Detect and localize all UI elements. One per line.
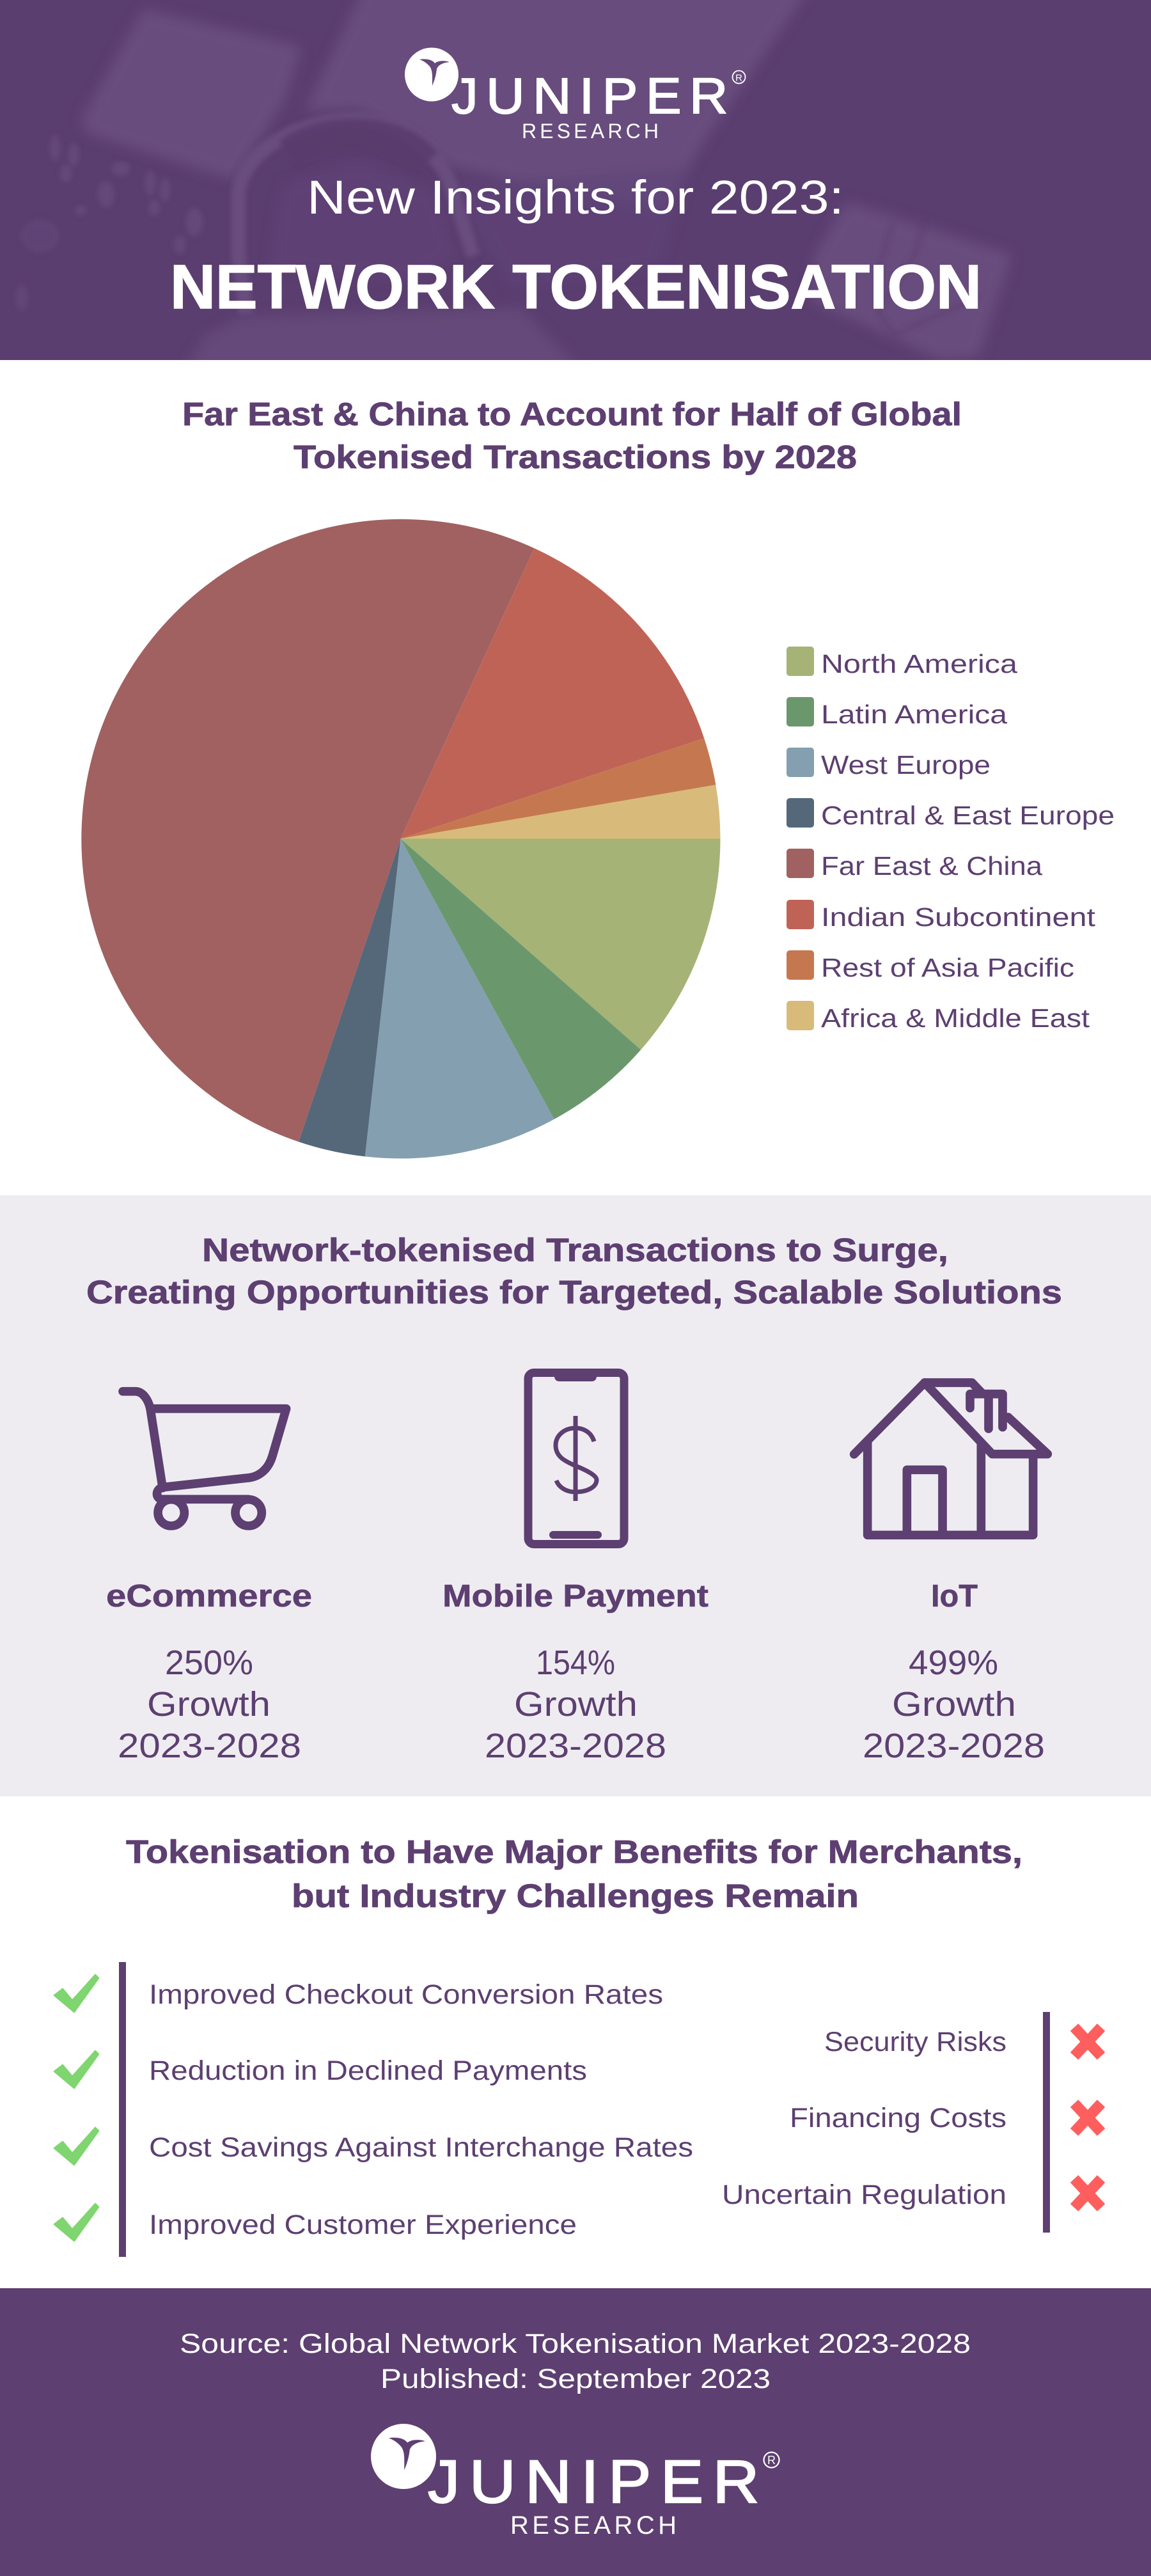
- icon: cross marks: [1074, 2027, 1101, 2208]
- panel: transaction growth: [0, 1195, 1151, 1796]
- source note: Published: September 2023: [380, 2364, 771, 2394]
- legend: Africa & Middle East: [821, 1003, 1090, 1033]
- list: benefits: Improved Checkout Conversion Rates: [149, 1979, 663, 2010]
- legend: North America: [821, 649, 1017, 679]
- logo: Juniper Research (footer): JUNIPER: [428, 2448, 769, 2516]
- panel: regional pie chart: [0, 360, 1151, 1195]
- stat: IoT: 2023-2028: [863, 1727, 1045, 1765]
- icon: mobile phone with dollar: [528, 1372, 624, 1544]
- list: challenges: Security Risks: [824, 2027, 1006, 2057]
- stat: eCommerce: 250%: [165, 1644, 253, 1682]
- legend: Rest of Asia Pacific: [821, 953, 1074, 982]
- divider: benefits bar: [119, 1962, 126, 2257]
- stat: IoT: 499%: [909, 1644, 998, 1682]
- logo: Juniper Research (footer): [371, 2424, 779, 2540]
- logo: Juniper Research (header): RESEARCH: [522, 120, 659, 143]
- list: challenges: Financing Costs: [790, 2103, 1006, 2133]
- stat: eCommerce: [106, 1579, 312, 1765]
- stat: Mobile Payment: Growth: [514, 1685, 638, 1724]
- stat: IoT: IoT: [931, 1579, 978, 1614]
- list: benefits: Improved Customer Experience: [149, 2210, 577, 2240]
- stat: eCommerce: Growth: [147, 1685, 270, 1724]
- pie chart: [81, 519, 721, 1159]
- legend: Latin America: [821, 700, 1007, 729]
- icon: shopping cart: [123, 1392, 286, 1526]
- panel: footer: [0, 2288, 1151, 2576]
- legend: Far East & China: [821, 851, 1042, 881]
- logo: Juniper Research (header): JUNIPER: [451, 67, 736, 124]
- legend: [787, 647, 1115, 1033]
- stat: Mobile Payment: 154%: [536, 1644, 615, 1682]
- list: benefits: [149, 1979, 693, 2240]
- heading: pie chart: Far East & China to Account for Half of Global: [182, 396, 962, 432]
- heading: benefits: but Industry Challenges Remain: [292, 1878, 859, 1914]
- heading: growth: Creating Opportunities for Targeted, Scalable Solutions: [86, 1274, 1062, 1310]
- icon: house: [854, 1383, 1047, 1535]
- title: NETWORK TOKENISATION: [170, 252, 982, 322]
- list: benefits: Reduction in Declined Payments: [149, 2055, 587, 2086]
- heading: growth: [86, 1232, 1062, 1310]
- list: benefits: Cost Savings Against Interchange Rates: [149, 2132, 693, 2163]
- stat: IoT: [863, 1579, 1045, 1765]
- logo: Juniper Research (footer): R: [767, 2454, 776, 2467]
- stat: IoT: Growth: [892, 1685, 1016, 1724]
- heading: benefits: [126, 1834, 1022, 1914]
- panel: benefits and challenges: [0, 1796, 1151, 2288]
- divider: challenges bar: [1043, 2012, 1050, 2233]
- source note: Source: Global Network Tokenisation Market 2023-2028: [180, 2329, 971, 2359]
- icon: check marks: [54, 1975, 98, 2241]
- stat: eCommerce: eCommerce: [106, 1579, 312, 1614]
- stat: Mobile Payment: 2023-2028: [485, 1727, 666, 1765]
- logo: Juniper Research (header): [405, 47, 746, 143]
- list: challenges: Uncertain Regulation: [722, 2179, 1006, 2210]
- stat: eCommerce: 2023-2028: [118, 1727, 301, 1765]
- heading: pie chart: Tokenised Transactions by 2028: [294, 439, 857, 475]
- stat: Mobile Payment: [442, 1579, 709, 1765]
- subtitle: New Insights for 2023:: [307, 171, 844, 224]
- heading: growth: Network-tokenised Transactions to Surge,: [202, 1232, 948, 1268]
- header banner: [0, 0, 1151, 384]
- source note: [180, 2329, 971, 2394]
- stat: Mobile Payment: Mobile Payment: [442, 1579, 709, 1614]
- logo: Juniper Research (header): R: [735, 73, 742, 83]
- list: challenges: [722, 2027, 1006, 2210]
- logo: Juniper Research (footer): RESEARCH: [510, 2511, 677, 2540]
- heading: benefits: Tokenisation to Have Major Benefits for Merchants,: [126, 1834, 1022, 1870]
- legend: Central & East Europe: [821, 801, 1115, 830]
- legend: Indian Subcontinent: [821, 902, 1096, 932]
- heading: pie chart: [182, 396, 962, 475]
- legend: West Europe: [821, 750, 990, 780]
